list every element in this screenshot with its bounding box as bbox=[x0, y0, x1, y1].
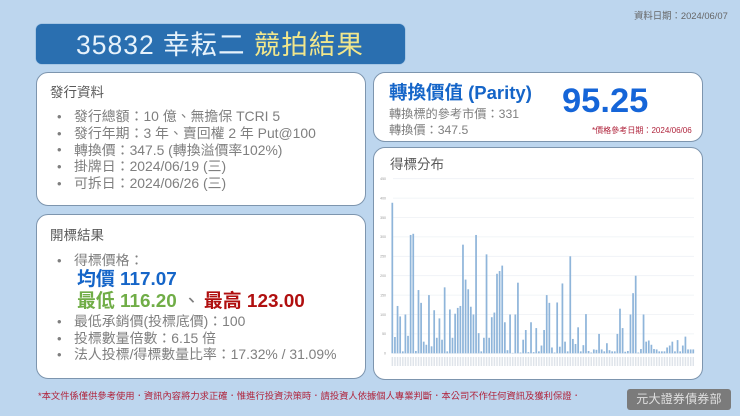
heading: allocation distribution: 得標分布 bbox=[390, 157, 444, 172]
x axis labels band bbox=[392, 357, 694, 366]
issuance info list: • bbox=[57, 142, 62, 157]
title banner bbox=[36, 24, 405, 64]
issuance info list: 掛牌日：2024/06/19 (三) bbox=[74, 158, 226, 174]
y axis labels: 0 bbox=[384, 352, 386, 356]
heading: issuance info: 發行資料 bbox=[50, 85, 104, 100]
y axis labels: 400 bbox=[380, 196, 386, 200]
issuance info list bbox=[57, 108, 316, 191]
department badge bbox=[627, 389, 731, 410]
bar chart: allocation distribution bbox=[380, 177, 694, 366]
panel: issuance info bbox=[36, 72, 366, 206]
auction stats list: 法人投標/得標數量比率：17.32% / 31.09% bbox=[74, 346, 336, 362]
y axis labels bbox=[380, 177, 386, 356]
parity inputs: 轉換價：347.5 bbox=[389, 122, 468, 136]
parity inputs bbox=[389, 107, 519, 136]
title text: 35832 幸耘二 競拍結果 bbox=[76, 30, 364, 60]
heading: auction results: 開標結果 bbox=[50, 228, 104, 243]
lowest and highest price: 最低 116.20 、最高 123.00 bbox=[77, 291, 305, 312]
auction stats list bbox=[57, 313, 336, 362]
auction stats list: • bbox=[57, 331, 62, 346]
parity inputs: 轉換標的參考市價：331 bbox=[389, 107, 519, 121]
issuance info list: • bbox=[57, 159, 62, 174]
y axis labels: 350 bbox=[380, 216, 386, 220]
panel: parity bbox=[373, 72, 703, 142]
y axis labels: 50 bbox=[382, 332, 386, 336]
panel: allocation distribution bbox=[373, 147, 703, 380]
issuance info list: 發行年期：3 年、賣回權 2 年 Put@100 bbox=[74, 125, 316, 141]
y axis labels: 250 bbox=[380, 255, 386, 259]
panel: auction results bbox=[36, 214, 366, 379]
auction stats list: • bbox=[57, 347, 62, 362]
issuance info list: 轉換價：347.5 (轉換溢價率102%) bbox=[74, 142, 282, 158]
winning price label: • bbox=[57, 253, 62, 268]
issuance info list: • bbox=[57, 176, 62, 191]
bars bbox=[391, 203, 694, 353]
price reference date: *價格參考日期：2024/06/06 bbox=[592, 126, 692, 135]
issuance info list: 發行總額：10 億、無擔保 TCRI 5 bbox=[74, 108, 280, 124]
y axis labels: 100 bbox=[380, 313, 386, 317]
disclaimer: *本文件係僅供參考使用．資訊內容將力求正確．惟進行投資決策時．請投資人依據個人專業判斷．本公司不作任何資訊及獲利保證． bbox=[38, 391, 581, 401]
department badge: 元大證券債券部 bbox=[636, 392, 722, 406]
issuance info list: • bbox=[57, 126, 62, 141]
y axis labels: 200 bbox=[380, 274, 386, 278]
auction stats list: • bbox=[57, 314, 62, 329]
issuance info list: • bbox=[57, 109, 62, 124]
winning price label: 得標價格： bbox=[74, 252, 143, 268]
auction stats list: 投標數量倍數：6.15 倍 bbox=[74, 330, 216, 346]
issuance info list: 可拆日：2024/06/26 (三) bbox=[74, 175, 226, 191]
y axis labels: 300 bbox=[380, 235, 386, 239]
auction stats list: 最低承銷價(投標底價)：100 bbox=[74, 313, 245, 329]
y axis labels: 450 bbox=[380, 177, 386, 181]
parity value: 95.25 bbox=[562, 82, 648, 120]
y axis labels: 150 bbox=[380, 293, 386, 297]
data date: 資料日期：2024/06/07 bbox=[634, 10, 728, 21]
average price: 均價 117.07 bbox=[77, 269, 177, 290]
parity heading: 轉換價值 (Parity) bbox=[389, 82, 532, 103]
